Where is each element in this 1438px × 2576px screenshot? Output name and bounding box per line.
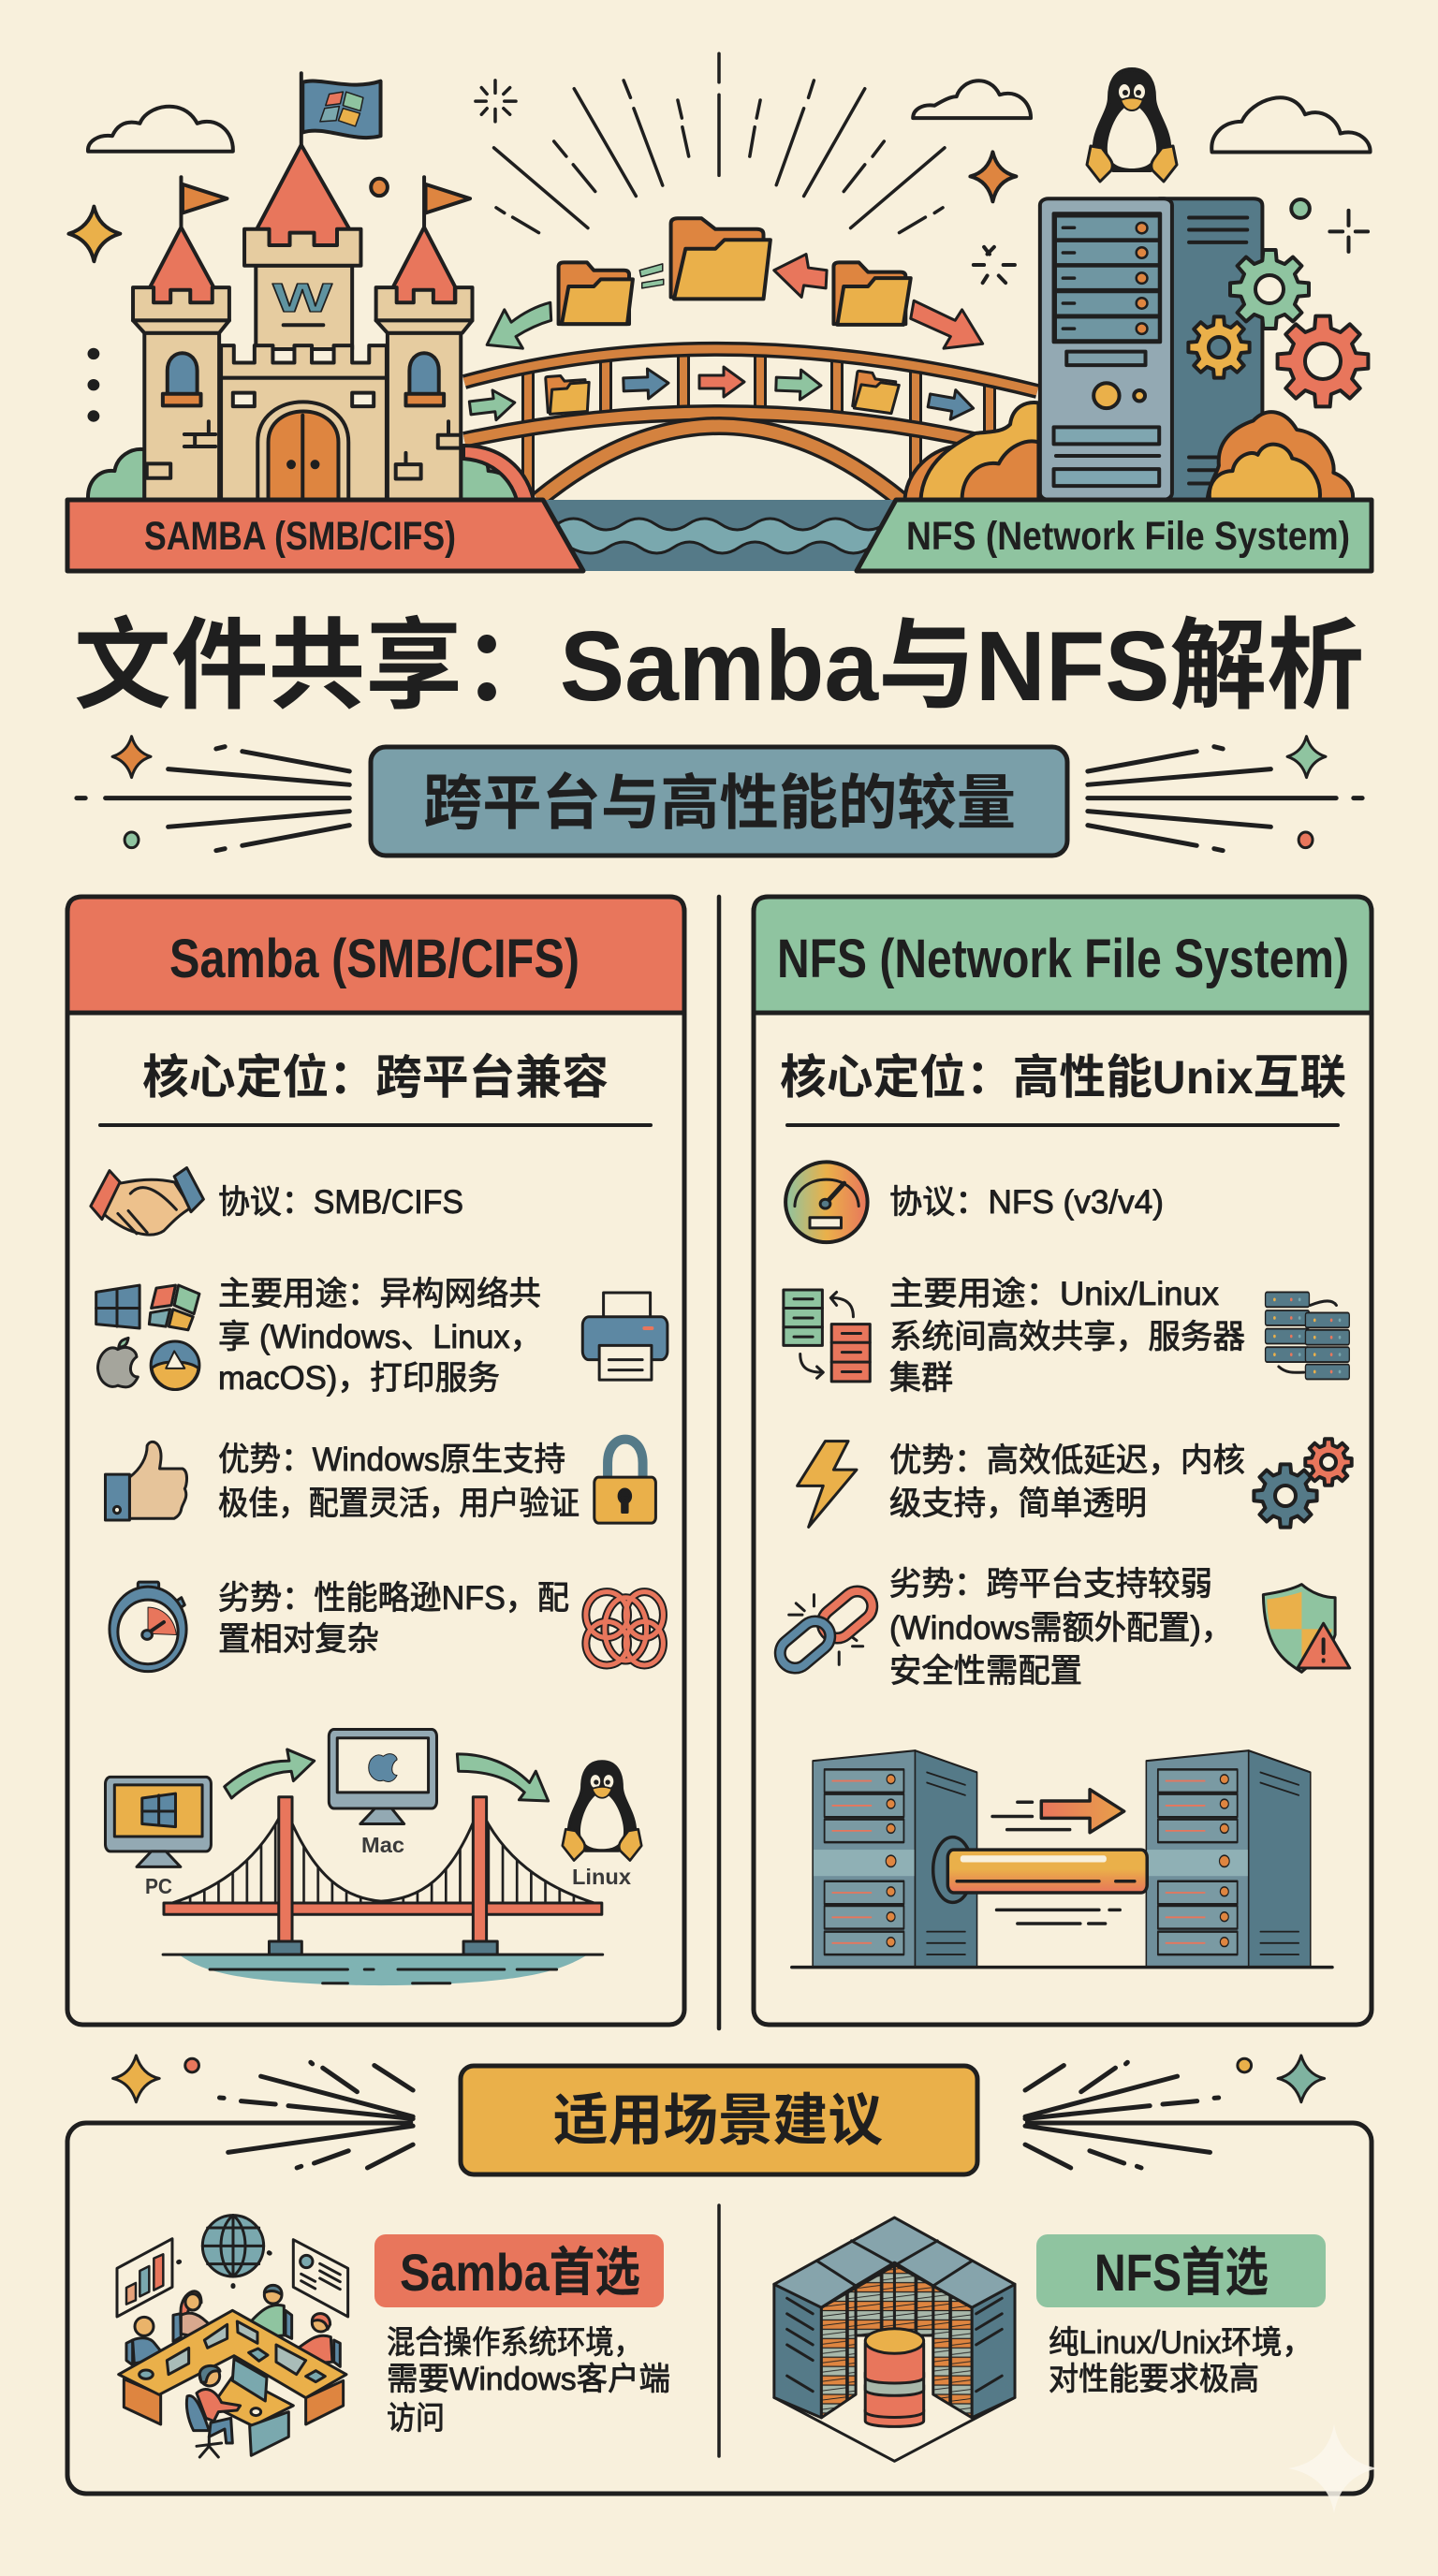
nfs items text: 劣势：跨平台支持较弱 xyxy=(889,1566,1212,1603)
samba header: Samba (SMB/CIFS) xyxy=(169,929,580,989)
left rack xyxy=(813,1750,977,1968)
subtitle banner xyxy=(77,737,1362,856)
office illustration xyxy=(117,2216,348,2457)
device labels xyxy=(145,1833,631,1898)
icon: thumbs up xyxy=(105,1442,187,1520)
nfs items text: 系统间高效共享，服务器 xyxy=(889,1319,1245,1355)
device labels: Linux xyxy=(572,1865,631,1889)
penguin xyxy=(1087,69,1177,182)
nfs recommendation: 对性能要求极高 xyxy=(1049,2362,1259,2397)
mac monitor xyxy=(329,1730,436,1824)
recommendations rays and sparkles xyxy=(113,2056,1325,2168)
folders and flow arrows xyxy=(487,218,770,348)
icon: gears xyxy=(1254,1439,1352,1528)
castle W emblem: W xyxy=(272,275,333,321)
people xyxy=(133,2285,332,2364)
nfs header xyxy=(754,897,1372,1013)
samba strip: SAMBA (SMB/CIFS) xyxy=(144,514,456,559)
gears xyxy=(1188,250,1368,406)
nfs recommendation: 纯Linux/Unix环境， xyxy=(1049,2325,1313,2361)
nfs items text: 优势：高效低延迟，内核 xyxy=(889,1442,1245,1479)
flow arrows xyxy=(225,1749,315,1798)
subtitle pill xyxy=(371,747,1067,856)
panel: usage recommendations xyxy=(67,2056,1372,2494)
nfs strip: NFS (Network File System) xyxy=(906,514,1350,559)
icon: server cluster xyxy=(1266,1292,1349,1379)
samba items text: 劣势：性能略逊NFS，配 xyxy=(218,1580,569,1617)
water under bridge xyxy=(538,500,899,571)
panel: nfs xyxy=(754,897,1372,2025)
nfs strip xyxy=(857,500,1372,571)
server tower, penguin, gears xyxy=(774,80,1371,500)
samba recommendation: 访问 xyxy=(387,2401,445,2437)
recommendations frame xyxy=(67,2123,1372,2494)
central tower xyxy=(257,145,349,249)
icon: speed gauge xyxy=(785,1162,868,1242)
device labels: Mac xyxy=(361,1833,404,1857)
decorations left xyxy=(68,107,388,420)
desks xyxy=(119,2310,346,2455)
title: 文件共享：Samba与NFS解析 xyxy=(74,611,1364,722)
laptops xyxy=(167,2321,306,2375)
nfs items text: 级支持，简单透明 xyxy=(889,1486,1147,1522)
icon: shield warning xyxy=(1263,1585,1350,1672)
samba header xyxy=(67,897,684,1013)
hero banner illustration xyxy=(67,53,1372,571)
server cluster with database xyxy=(774,2217,1015,2461)
nfs items icons xyxy=(784,1162,1350,1672)
nfs items text: 协议：NFS (v3/v4) xyxy=(889,1184,1164,1221)
globe xyxy=(202,2216,264,2276)
icon: file sync xyxy=(784,1290,870,1382)
samba items text: macOS)，打印服务 xyxy=(218,1360,500,1397)
nfs items text: (Windows需额外配置)， xyxy=(889,1610,1233,1647)
dotted links xyxy=(179,2253,287,2305)
samba items text: 优势：Windows原生支持 xyxy=(218,1442,565,1478)
recommendations heading xyxy=(461,2066,977,2174)
nfs recommendation: NFS首选 xyxy=(1094,2243,1269,2302)
bridge xyxy=(463,349,1037,500)
icon: operating systems xyxy=(96,1285,199,1389)
suspension bridge xyxy=(163,1797,603,1985)
castle xyxy=(88,73,519,500)
subtitle banner: 跨平台与高性能的较量 xyxy=(423,769,1016,837)
right tower xyxy=(422,177,426,227)
recommendations heading: 适用场景建议 xyxy=(553,2089,883,2152)
nfs panel frame xyxy=(754,897,1372,2025)
icon: tangled knot xyxy=(586,1592,663,1665)
chart panel xyxy=(117,2239,172,2317)
document panel xyxy=(293,2240,348,2317)
samba strip xyxy=(67,500,583,571)
icon: lightning xyxy=(798,1442,857,1527)
nfs items text: 主要用途：Unix/Linux xyxy=(889,1276,1220,1312)
samba items text: 极佳，配置灵活，用户验证 xyxy=(218,1486,580,1522)
icon: stopwatch xyxy=(110,1582,186,1672)
flag with windows logo xyxy=(301,73,381,145)
center divider xyxy=(717,897,721,2028)
nfs items text xyxy=(889,1184,1245,1690)
samba recommendation: Samba首选 xyxy=(400,2243,640,2302)
samba bridge illustration xyxy=(105,1730,641,1985)
nfs items text: 安全性需配置 xyxy=(889,1653,1082,1690)
speed arrow xyxy=(1041,1790,1124,1833)
linux penguin xyxy=(563,1762,641,1861)
samba items text: 享 (Windows、Linux， xyxy=(218,1319,542,1355)
sparkle rays xyxy=(476,53,945,233)
nfs positioning: 核心定位：高性能Unix互联 xyxy=(780,1051,1346,1104)
chairs xyxy=(126,2310,340,2366)
samba items text: 置相对复杂 xyxy=(218,1621,379,1658)
icon: printer xyxy=(582,1293,668,1380)
samba positioning: 核心定位：跨平台兼容 xyxy=(142,1051,609,1104)
icon: lock xyxy=(594,1440,655,1523)
icon: handshake xyxy=(91,1168,203,1235)
data pipe xyxy=(933,1837,1147,1902)
samba items text: 主要用途：异构网络共 xyxy=(218,1276,541,1312)
samba items text xyxy=(218,1184,580,1658)
samba items icons xyxy=(91,1168,668,1672)
samba items text: 协议：SMB/CIFS xyxy=(218,1184,463,1221)
pc monitor xyxy=(105,1777,211,1866)
curtain wall and gate xyxy=(221,378,387,500)
right rack xyxy=(1146,1750,1311,1968)
device labels: PC xyxy=(145,1874,172,1898)
left tower xyxy=(179,177,183,227)
divider xyxy=(717,2205,721,2456)
samba panel frame xyxy=(67,897,684,2025)
front worker xyxy=(186,2365,241,2457)
panel: samba xyxy=(67,897,684,2025)
samba recommendation: 需要Windows客户端 xyxy=(387,2362,670,2397)
nfs items text: 集群 xyxy=(889,1360,953,1397)
monitor xyxy=(232,2359,267,2401)
watermark sparkle xyxy=(1288,2424,1378,2513)
bushes xyxy=(88,449,144,500)
subtitle rays and sparkles xyxy=(77,737,1362,851)
samba recommendation: 混合操作系统环境， xyxy=(387,2325,642,2361)
icon: broken link xyxy=(774,1585,878,1675)
nfs recommendation xyxy=(1036,2234,1326,2397)
samba recommendation xyxy=(374,2234,670,2437)
high-speed servers illustration xyxy=(792,1750,1332,1968)
icon: broken chain sparks xyxy=(789,1595,863,1664)
